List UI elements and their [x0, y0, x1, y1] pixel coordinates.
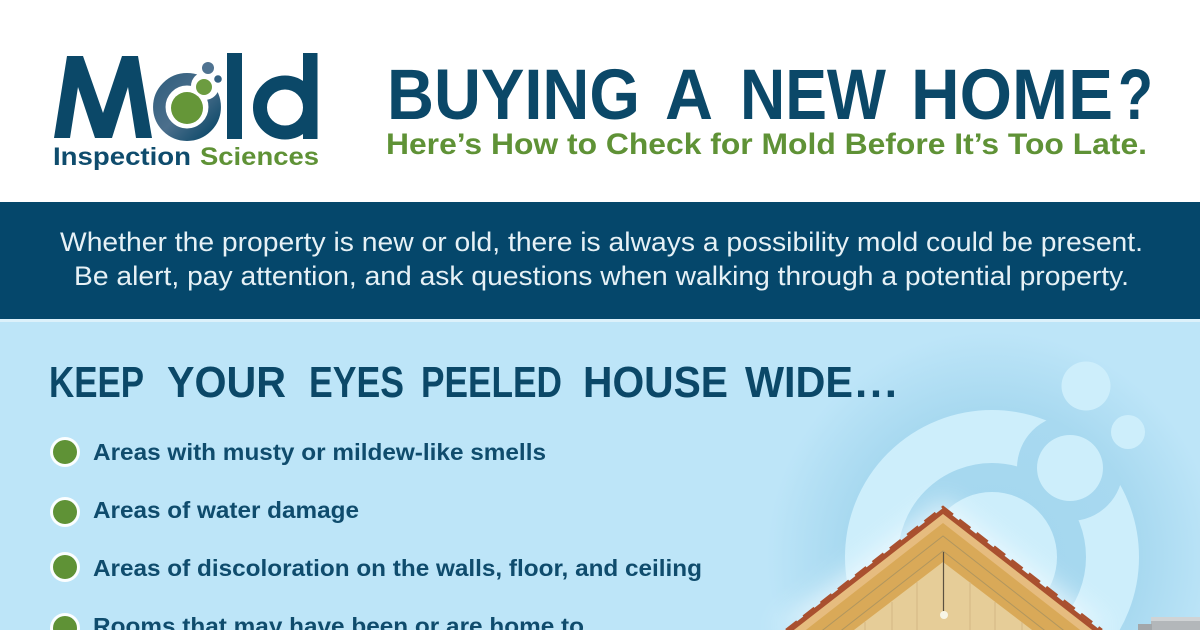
intro banner: Be alert, pay attention, and ask questions when walking through a potential property. — [74, 261, 1129, 291]
logo letter M — [54, 56, 152, 138]
illustration: gutter at right edge — [1138, 617, 1200, 630]
logo: Mold Inspection Sciences — [53, 53, 319, 171]
section heading: YOUR — [167, 358, 286, 407]
intro text: Whether the property is new or old, there is always a possibility mold could be present. — [60, 227, 1143, 257]
illustration: house roof — [782, 507, 1104, 630]
list item 2: Areas of water damage — [93, 497, 359, 523]
gable siding — [850, 562, 1036, 630]
title: NEW — [740, 56, 886, 135]
title: HOME — [911, 56, 1113, 135]
section heading: KEEP — [49, 358, 144, 407]
logo: Mold Inspection Sciences: Sciences — [200, 143, 319, 171]
section heading: EYES — [309, 358, 404, 407]
logo letter d — [260, 53, 318, 139]
section heading: PEELED — [421, 358, 562, 407]
roof tiles — [782, 508, 1104, 630]
title: A — [665, 56, 713, 135]
fascia bands — [790, 514, 1096, 630]
logo wordmark: Inspection — [53, 143, 191, 171]
list item 1: Areas with musty or mildew-like smells — [93, 439, 546, 465]
section heading: WIDE — [745, 358, 853, 407]
title — [387, 56, 1153, 135]
background mold graphic — [782, 362, 1188, 630]
section heading: ... — [855, 358, 897, 407]
intro banner — [0, 202, 1200, 319]
list item 3: Areas of discoloration on the walls, floor, and ceiling — [93, 555, 702, 581]
logo ring and spores — [159, 62, 222, 135]
subtitle: Here’s How to Check for Mold Before It’s Too Late. — [386, 128, 1147, 161]
logo letter l — [227, 53, 242, 139]
section heading: HOUSE — [583, 358, 728, 407]
hanging light bulb — [940, 552, 948, 619]
title: ? — [1118, 56, 1153, 135]
panel: house wide checklist — [0, 319, 1200, 630]
section heading — [49, 358, 897, 407]
title: BUYING — [387, 56, 640, 135]
